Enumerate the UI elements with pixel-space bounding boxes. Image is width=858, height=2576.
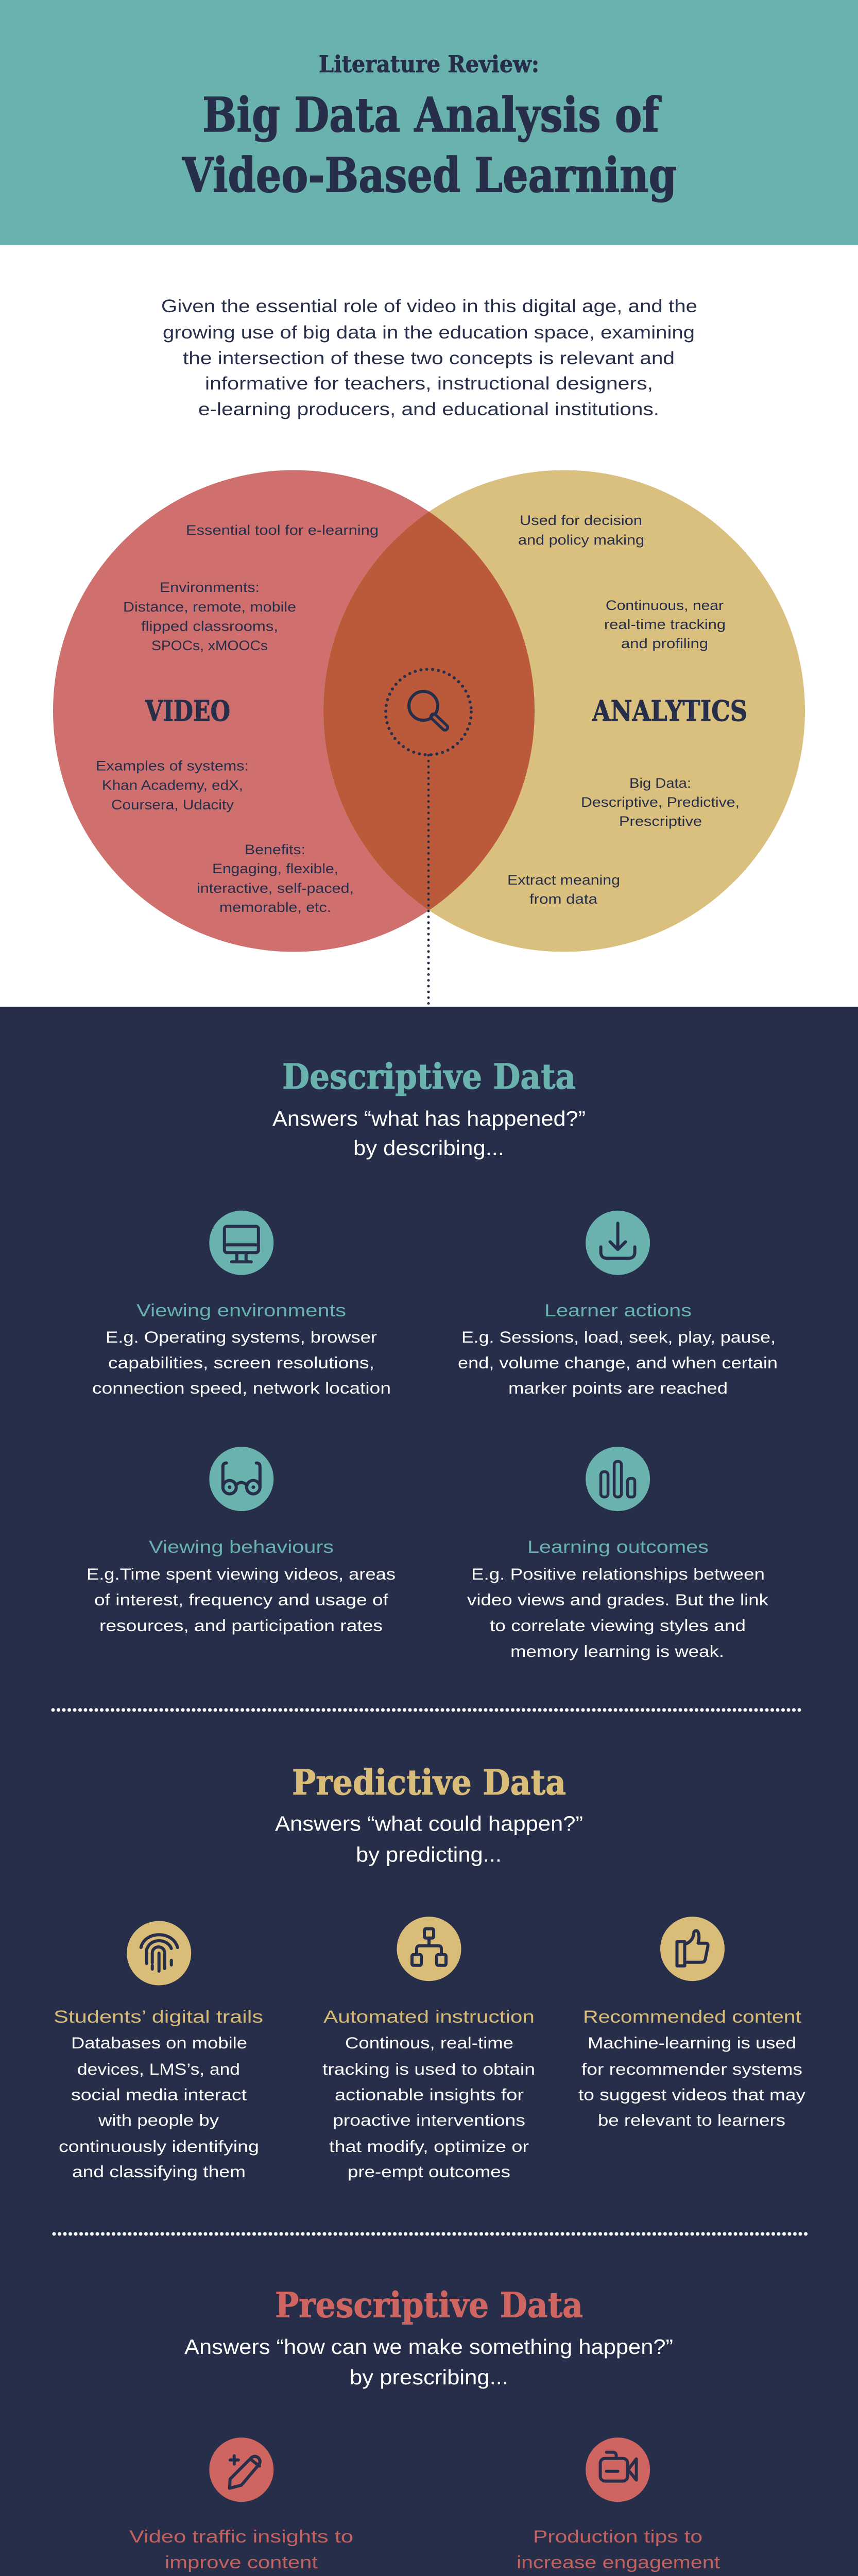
card: students' digital trails: Students’ digital trails xyxy=(54,2007,263,2027)
icon: magnifier in dotted ring xyxy=(386,669,471,755)
card: automated instruction: actionable insights for xyxy=(335,2086,524,2104)
card: viewing environments xyxy=(92,1211,391,1397)
title xyxy=(182,87,677,203)
descriptive question xyxy=(272,1107,586,1160)
video facts: memorable, etc. xyxy=(219,900,331,915)
heading: predictive data: Predictive Data xyxy=(292,1762,566,1803)
card: learner actions: E.g. Sessions, load, seek, play, pause, xyxy=(461,1328,776,1346)
icon: fingerprint xyxy=(127,1921,191,1986)
video facts: Essential tool for e-learning xyxy=(186,522,379,538)
intro paragraph: informative for teachers, instructional designers, xyxy=(205,374,653,394)
card: learning outcomes: memory learning is weak. xyxy=(510,1642,724,1660)
video facts: flipped classrooms, xyxy=(141,618,278,634)
video facts: Distance, remote, mobile xyxy=(123,599,296,615)
card: viewing environments: capabilities, screen resolutions, xyxy=(108,1353,374,1372)
card: recommended content: be relevant to learners xyxy=(598,2111,785,2129)
intro paragraph: Given the essential role of video in this digital age, and the xyxy=(161,296,697,316)
card: recommended content: to suggest videos that may xyxy=(578,2086,805,2104)
card: students' digital trails: Databases on mobile xyxy=(71,2033,247,2052)
card: viewing behaviours xyxy=(87,1447,396,1635)
card: production tips to increase engagement: Production tips to xyxy=(533,2527,702,2547)
icon: monitor xyxy=(209,1211,273,1275)
prescriptive question xyxy=(184,2335,673,2389)
card: recommended content: Recommended content xyxy=(583,2007,802,2027)
video facts: Khan Academy, edX, xyxy=(102,777,243,793)
icon: download xyxy=(586,1211,650,1275)
card: learning outcomes xyxy=(467,1447,768,1660)
analytics facts: and profiling xyxy=(621,636,708,651)
predictive question: by predicting... xyxy=(356,1843,502,1867)
card: students' digital trails: devices, LMS’s, and xyxy=(77,2060,240,2078)
card: automated instruction: pre-empt outcomes xyxy=(348,2162,510,2181)
card: learner actions: end, volume change, and when certain xyxy=(458,1353,778,1372)
card: viewing behaviours: resources, and participation rates xyxy=(99,1616,383,1635)
card: automated instruction: proactive interventions xyxy=(333,2111,525,2129)
icon: bar chart xyxy=(586,1447,650,1511)
card: viewing environments: E.g. Operating systems, browser xyxy=(106,1328,377,1346)
video facts: Examples of systems: xyxy=(96,758,249,774)
icon: org chart xyxy=(397,1917,461,1981)
analytics facts: from data xyxy=(529,891,598,907)
video label: VIDEO xyxy=(145,694,230,727)
panel: header banner xyxy=(0,0,858,245)
analytics facts: Prescriptive xyxy=(619,814,702,829)
video facts: Benefits: xyxy=(245,842,305,857)
card: viewing environments: Viewing environments xyxy=(136,1301,346,1320)
card: learning outcomes: to correlate viewing styles and xyxy=(490,1616,746,1635)
analytics label: ANALYTICS xyxy=(592,694,747,727)
card: recommended content: Machine-learning is used xyxy=(588,2033,796,2052)
card: viewing environments: connection speed, network location xyxy=(92,1379,391,1397)
analytics facts: Continuous, near xyxy=(606,598,724,613)
analytics facts: Extract meaning xyxy=(507,872,620,888)
card: automated instruction: Continous, real-time xyxy=(345,2033,513,2052)
overlap lens xyxy=(323,512,535,910)
intro paragraph: the intersection of these two concepts is relevant and xyxy=(183,348,675,368)
heading: descriptive data: Descriptive Data xyxy=(282,1056,576,1097)
circle: video xyxy=(53,470,535,952)
intro paragraph: growing use of big data in the education space, examining xyxy=(163,323,695,343)
card: viewing behaviours: of interest, frequency and usage of xyxy=(94,1590,388,1609)
icon: glasses xyxy=(209,1447,273,1511)
icon: pencil plus xyxy=(209,2437,273,2502)
card: automated instruction xyxy=(322,1917,535,2181)
predictive question xyxy=(275,1812,583,1867)
descriptive question: by describing... xyxy=(353,1136,504,1160)
card: learning outcomes: video views and grades. But the link xyxy=(467,1590,768,1609)
card: learning outcomes: Learning outcomes xyxy=(527,1537,709,1557)
card: learner actions: Learner actions xyxy=(544,1301,692,1320)
intro paragraph: e-learning producers, and educational institutions. xyxy=(198,399,659,419)
prescriptive question: Answers “how can we make something happen?” xyxy=(184,2335,673,2359)
analytics facts: Big Data: xyxy=(629,775,691,791)
analytics facts: Used for decision xyxy=(520,513,642,528)
icon: thumbs up xyxy=(660,1917,725,1981)
arrow: dotted connector from venn to data xyxy=(427,755,430,1007)
card: recommended content: for recommender systems xyxy=(581,2060,802,2078)
video facts: interactive, self-paced, xyxy=(197,880,354,896)
card: video traffic insights to improve content: Video traffic insights to xyxy=(129,2527,353,2547)
card: automated instruction: Automated instruction xyxy=(323,2007,535,2027)
analytics facts: real-time tracking xyxy=(604,617,726,632)
panel: navy data sections xyxy=(0,755,858,2576)
predictive question: Answers “what could happen?” xyxy=(275,1812,583,1836)
video facts xyxy=(96,522,379,915)
card: video traffic insights to improve content: improve content xyxy=(165,2553,318,2572)
video facts: SPOCs, xMOOCs xyxy=(151,638,268,653)
video facts: Engaging, flexible, xyxy=(212,861,338,876)
venn diagram: video and analytics xyxy=(53,470,805,952)
card: viewing behaviours: E.g.Time spent viewing videos, areas xyxy=(87,1565,396,1583)
card: viewing behaviours: Viewing behaviours xyxy=(149,1537,334,1557)
card: students' digital trails: and classifying them xyxy=(72,2162,246,2181)
video facts: Environments: xyxy=(160,580,260,595)
card: students' digital trails: social media interact xyxy=(71,2086,247,2104)
card: automated instruction: tracking is used to obtain xyxy=(322,2060,535,2078)
analytics facts xyxy=(507,513,740,907)
card: students' digital trails: continuously identifying xyxy=(59,2137,259,2156)
prescriptive question: by prescribing... xyxy=(350,2365,508,2389)
analytics facts: and policy making xyxy=(518,532,644,548)
subtitle: Literature Review: xyxy=(319,50,539,78)
card: learner actions: marker points are reached xyxy=(508,1379,728,1397)
analytics facts: Descriptive, Predictive, xyxy=(581,794,740,810)
intro paragraph xyxy=(161,296,697,419)
descriptive question: Answers “what has happened?” xyxy=(272,1107,586,1130)
circle: analytics xyxy=(323,470,805,952)
title: Video-Based Learning xyxy=(182,147,677,203)
icon: video camera xyxy=(586,2437,650,2502)
title: Big Data Analysis of xyxy=(202,87,662,143)
card: automated instruction: that modify, optimize or xyxy=(329,2137,529,2156)
card: production tips to increase engagement xyxy=(454,2437,781,2576)
card: learning outcomes: E.g. Positive relationships between xyxy=(471,1565,765,1583)
card: recommended content xyxy=(578,1917,805,2129)
card: video traffic insights to improve content xyxy=(88,2437,394,2576)
card: students' digital trails xyxy=(54,1921,263,2181)
heading: prescriptive data: Prescriptive Data xyxy=(275,2284,583,2326)
card: learner actions xyxy=(458,1211,778,1397)
card: production tips to increase engagement: increase engagement xyxy=(517,2553,720,2572)
video facts: Coursera, Udacity xyxy=(111,797,234,812)
card: students' digital trails: with people by xyxy=(98,2111,219,2129)
